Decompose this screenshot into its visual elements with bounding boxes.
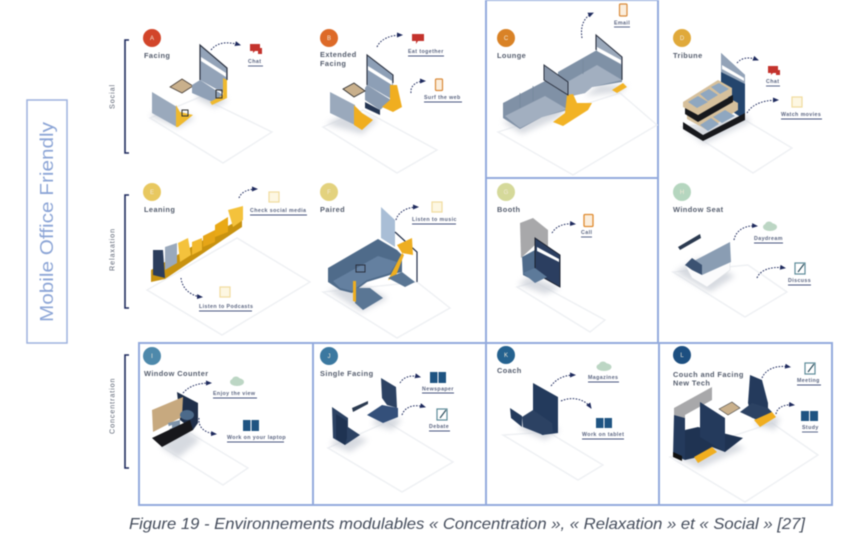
label: Newspaper: Newspaper xyxy=(422,386,454,392)
arrow xyxy=(737,58,758,63)
laptop xyxy=(356,265,365,272)
panel D: Tribune xyxy=(673,29,822,173)
badge G: G xyxy=(504,190,509,196)
seat xyxy=(685,242,731,287)
heading: Facing xyxy=(144,51,170,60)
icon: phone xyxy=(620,4,627,16)
icon: cloud xyxy=(763,222,777,231)
panel F: Paired xyxy=(320,183,457,338)
panel B: Extended Facing xyxy=(320,29,462,173)
booth xyxy=(520,218,560,287)
label: Enjoy the view: Enjoy the view xyxy=(213,391,256,397)
heading: Window Counter xyxy=(144,369,209,378)
heading: Couch and Facing xyxy=(673,370,744,379)
side label: Mobile Office Friendly xyxy=(27,100,67,343)
badge H: H xyxy=(680,190,684,196)
rear seat xyxy=(192,45,227,105)
heading: Booth xyxy=(497,205,521,214)
badge K xyxy=(497,346,515,364)
badge G xyxy=(497,183,515,201)
icon: phone xyxy=(436,79,442,90)
heading: Leaning xyxy=(144,205,175,214)
sofa xyxy=(503,50,627,129)
label: Magazines: Magazines xyxy=(588,375,618,381)
icon: screen xyxy=(220,287,230,297)
label: Daydream: Daydream xyxy=(754,236,783,242)
arrow xyxy=(776,405,794,414)
category: Social xyxy=(108,40,129,153)
arrow xyxy=(183,383,211,393)
badge F: F xyxy=(327,190,331,196)
arrow xyxy=(757,267,785,278)
arrow xyxy=(377,35,402,47)
arrow xyxy=(561,399,591,408)
label: Check social media: Check social media xyxy=(250,208,306,214)
panel A: Facing xyxy=(143,29,272,163)
category: Relaxation: Relaxation xyxy=(108,228,116,271)
side label: Mobile Office Friendly: Mobile Office Friendly xyxy=(37,122,57,322)
arrow xyxy=(762,366,790,378)
badge E: E xyxy=(150,190,154,196)
heading: Coach xyxy=(497,366,522,375)
icon: pad xyxy=(437,409,447,420)
label: Surf the web: Surf the web xyxy=(424,95,461,101)
front chair xyxy=(353,281,383,310)
label: Watch movies: Watch movies xyxy=(781,112,821,118)
label: Listen to Podcasts: Listen to Podcasts xyxy=(199,304,253,310)
category: Social: Social xyxy=(108,84,116,109)
bar xyxy=(352,401,368,412)
table xyxy=(343,83,365,97)
panel K: Coach xyxy=(486,343,659,505)
heading: Tribune xyxy=(673,51,703,60)
arrow xyxy=(581,13,593,38)
arrow xyxy=(551,375,575,386)
yellow chair xyxy=(388,238,415,287)
panel L: Couch and Facing New Tech xyxy=(659,343,832,505)
panel E: Leaning xyxy=(143,183,310,335)
facing chair xyxy=(740,375,776,427)
front seat xyxy=(152,92,193,127)
arrow xyxy=(396,207,418,220)
badge I: I xyxy=(151,354,153,360)
badge F xyxy=(320,183,338,201)
panel H: Window Seat xyxy=(673,183,811,317)
arrow xyxy=(239,189,257,198)
icon: book xyxy=(243,420,259,431)
lower tier xyxy=(683,97,745,141)
badge I xyxy=(143,347,161,365)
arrow xyxy=(211,43,240,50)
icon: chat xyxy=(250,44,262,54)
badge E xyxy=(143,183,161,201)
icon: pad xyxy=(795,263,805,274)
left chair xyxy=(332,407,360,445)
label: Work on tablet: Work on tablet xyxy=(582,432,624,438)
badge D xyxy=(673,29,691,47)
arch xyxy=(673,387,712,461)
category: Relaxation xyxy=(108,195,129,308)
caption: Figure 19 - Environnements modulables « Concentration », « Relaxation » et « Social » [27] xyxy=(129,516,806,533)
panel J: Single Facing xyxy=(313,343,486,505)
badge D: D xyxy=(680,36,685,42)
arrow xyxy=(411,81,425,93)
arrow xyxy=(734,226,757,240)
wall bench xyxy=(151,206,243,282)
icon: screen xyxy=(269,192,279,202)
upper tier xyxy=(683,80,733,122)
screens xyxy=(544,35,622,95)
right chair xyxy=(367,378,398,423)
badge A: A xyxy=(150,36,154,42)
badge C xyxy=(497,29,515,47)
icon: screen xyxy=(792,97,802,107)
label: Work on your laptop: Work on your laptop xyxy=(227,435,286,441)
icon: cloud xyxy=(230,376,244,386)
arrow xyxy=(552,224,575,233)
badge L xyxy=(673,346,691,364)
icon: cloud xyxy=(596,362,612,371)
badge B: B xyxy=(327,36,331,42)
icon: chat xyxy=(412,34,424,44)
heading: Window Seat xyxy=(673,205,724,214)
icon: book xyxy=(596,418,612,428)
badge K: K xyxy=(504,353,508,359)
panel G: Booth xyxy=(486,178,658,343)
category: Concentration: Concentration xyxy=(108,378,116,434)
label: Chat: Chat xyxy=(766,79,779,85)
heading: Extended xyxy=(320,50,357,59)
label: Email: Email xyxy=(614,20,630,26)
icon: phone xyxy=(584,214,593,226)
label: Call: Call xyxy=(581,230,592,236)
category: Concentration xyxy=(108,355,129,468)
bar xyxy=(678,234,701,250)
arrow xyxy=(199,418,216,434)
badge L: L xyxy=(680,353,684,359)
coach seat xyxy=(510,383,558,435)
screen xyxy=(381,207,417,282)
icon: book xyxy=(801,411,818,421)
badge J xyxy=(320,347,338,365)
icon: book xyxy=(430,372,446,383)
label: Listen to music: Listen to music xyxy=(412,217,457,223)
label: Study: Study xyxy=(802,425,819,431)
back panel xyxy=(721,53,745,120)
heading: Paired xyxy=(320,205,345,214)
heading: Lounge xyxy=(497,51,526,60)
rear seat xyxy=(365,55,402,115)
arrow xyxy=(402,406,425,415)
counter xyxy=(152,392,198,447)
arrow xyxy=(181,278,202,297)
centre couch xyxy=(685,402,743,463)
badge B xyxy=(320,29,338,47)
table xyxy=(719,402,740,415)
label: Chat: Chat xyxy=(248,59,261,65)
icon: screen xyxy=(432,202,442,212)
sofa xyxy=(328,239,402,293)
badge C: C xyxy=(504,36,509,42)
label: Eat together: Eat together xyxy=(408,49,444,55)
arrow xyxy=(747,100,778,113)
arrow xyxy=(400,376,420,383)
label: Discuss: Discuss xyxy=(788,278,811,284)
panel I: Window Counter xyxy=(139,343,313,505)
label: Meeting: Meeting xyxy=(797,378,820,384)
front seat xyxy=(330,92,373,130)
heading: Facing xyxy=(320,59,346,68)
label: Debate: Debate xyxy=(429,424,449,430)
table xyxy=(170,79,193,93)
icon: chat xyxy=(768,66,780,75)
icon: pad xyxy=(805,363,815,374)
panel C: Lounge xyxy=(486,0,658,178)
heading: New Tech xyxy=(673,378,710,388)
heading: Single Facing xyxy=(320,369,374,378)
badge J: J xyxy=(328,354,330,360)
